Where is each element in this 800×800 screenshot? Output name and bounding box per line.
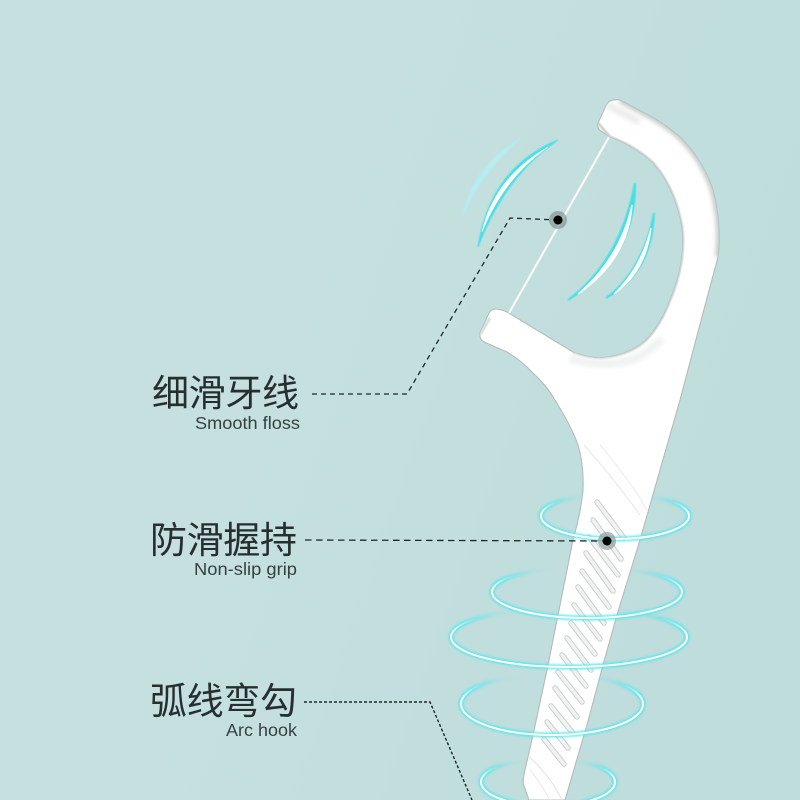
pick body <box>480 100 719 800</box>
ring 5 <box>481 758 615 800</box>
pick shading <box>478 100 719 800</box>
caption: non-slip grip: Non-slip grip <box>194 559 297 579</box>
marker dot: floss <box>549 211 567 229</box>
floss pick <box>478 100 719 800</box>
arc: inner left <box>478 140 558 247</box>
arc: inner right <box>568 183 635 300</box>
caption: arc hook: Arc hook <box>226 720 297 740</box>
infographic canvas <box>152 99 720 800</box>
callout line: arc hook <box>304 702 472 800</box>
label: smooth floss <box>152 373 300 433</box>
label: non-slip grip <box>150 520 297 579</box>
ring 3 <box>451 607 687 667</box>
ring 1 <box>541 493 689 539</box>
grip slots <box>544 502 624 764</box>
motion arcs around floss <box>463 139 654 300</box>
callout line: smooth floss <box>312 218 558 394</box>
arc: outer right <box>606 213 654 298</box>
marker dot: grip <box>598 532 616 550</box>
heading: non-slip grip: 防滑握持 <box>150 520 297 561</box>
label: arc hook <box>150 681 297 740</box>
ring 2 <box>492 566 682 618</box>
caption: smooth floss: Smooth floss <box>195 413 300 433</box>
glowing rings around handle <box>451 493 689 800</box>
heading: arc hook: 弧线弯勾 <box>150 681 297 722</box>
floss thread <box>509 137 609 313</box>
callout line: non-slip grip <box>305 540 607 541</box>
heading: smooth floss: 细滑牙线 <box>152 373 299 414</box>
ring 4 <box>461 673 643 735</box>
arc: faint outer left <box>463 139 520 215</box>
